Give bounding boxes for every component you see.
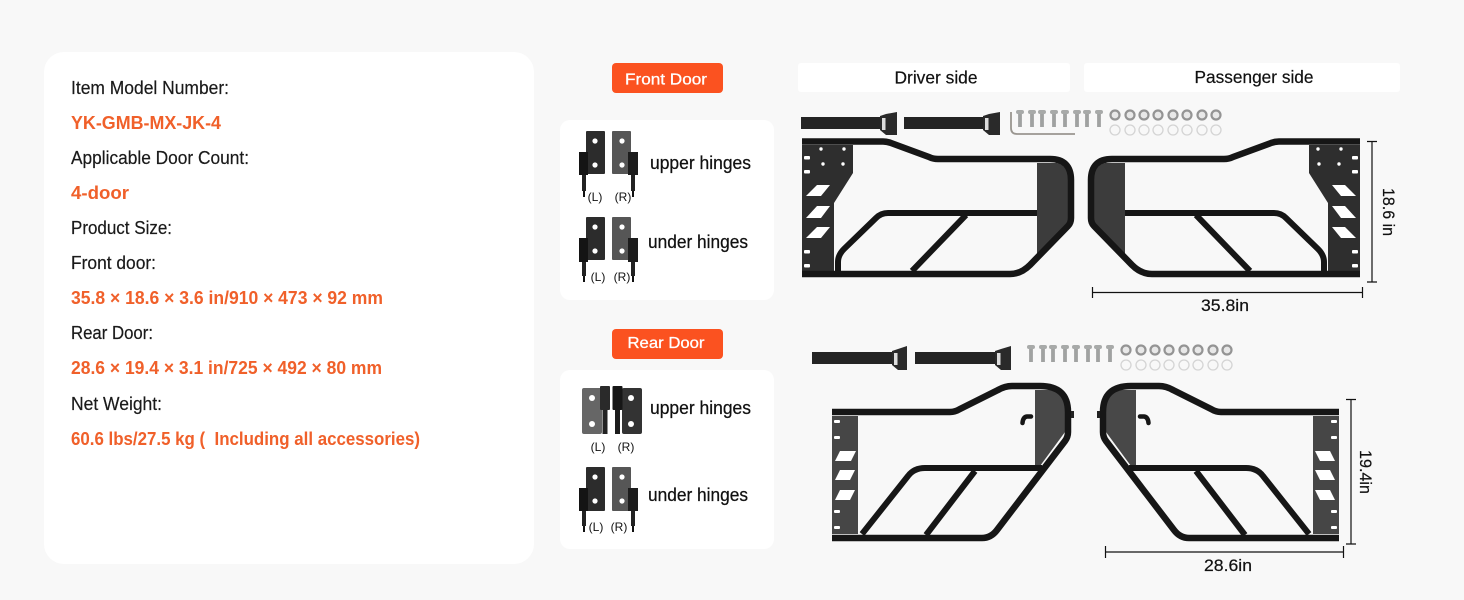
button: front door	[612, 63, 723, 93]
icon: rear upper hinge left	[582, 386, 610, 434]
text: rear door label: Rear Door:	[71, 323, 153, 343]
text: door count value: 4-door	[71, 183, 129, 203]
icon: rear door washers	[1121, 346, 1232, 370]
button: rear door	[612, 329, 723, 359]
text: net weight value: 60.6 lbs/27.5 kg ( Including all accessories)	[71, 429, 420, 449]
icon: front upper hinge left	[579, 131, 605, 197]
panel: rear door hinges	[560, 370, 774, 549]
text: net weight label: Net Weight:	[71, 394, 162, 414]
label: R: (R)	[618, 440, 634, 454]
label: R: (R)	[611, 520, 627, 534]
icon: front door screws and wrench	[1011, 110, 1103, 134]
panel: specifications	[44, 52, 534, 564]
heading: driver side: Driver side	[894, 68, 978, 88]
label: L: (L)	[588, 190, 602, 204]
icon: front upper hinge right	[612, 131, 638, 197]
text: item model number value: YK-GMB-MX-JK-4	[71, 113, 221, 133]
button: front door: Front Door	[625, 72, 708, 88]
text: under hinges: under hinges	[648, 485, 748, 505]
panel: front door hinges	[560, 120, 774, 300]
text: rear door size: 28.6 × 19.4 × 3.1 in/725 × 492 × 80 mm	[71, 358, 382, 378]
text: upper hinges: upper hinges	[650, 153, 751, 173]
door: front driver side	[802, 142, 1071, 274]
text: front door label: Front door:	[71, 253, 156, 273]
dimension: front width	[1092, 287, 1362, 315]
heading: passenger side: Passenger side	[1194, 67, 1314, 87]
label: L: (L)	[589, 520, 603, 534]
heading: driver side	[798, 63, 1070, 92]
text: front door size: 35.8 × 18.6 × 3.6 in/910 × 473 × 92 mm	[71, 288, 383, 308]
icon: front under hinge left	[579, 217, 605, 282]
dimension: rear width: 28.6in	[1204, 556, 1252, 575]
text: under hinges: under hinges	[648, 232, 748, 252]
dimension: rear height	[1346, 400, 1375, 544]
text: door count label: Applicable Door Count:	[71, 148, 249, 168]
icon: front door straps	[801, 112, 1000, 135]
text: product size label: Product Size:	[71, 218, 172, 238]
label: L: (L)	[591, 270, 605, 284]
icon: rear upper hinge right	[612, 386, 642, 434]
icon: front under hinge right	[612, 217, 638, 282]
icon: rear door screws	[1027, 345, 1114, 362]
button: rear door: Rear Door	[628, 335, 705, 352]
label: R: (R)	[614, 270, 630, 284]
dimension: front width: 35.8in	[1201, 296, 1249, 315]
label: L: (L)	[591, 440, 605, 454]
text: upper hinges: upper hinges	[650, 398, 751, 418]
dimension: front height: 18.6 in	[1379, 188, 1398, 236]
icon: rear under hinge right	[612, 467, 638, 532]
label: R: (R)	[615, 190, 631, 204]
dimension: rear width	[1106, 546, 1344, 575]
door: front passenger side	[1091, 142, 1360, 274]
door: rear driver side	[832, 386, 1074, 538]
icon: front door washers	[1110, 110, 1221, 135]
icon: rear door straps	[812, 346, 1011, 370]
text: item model number label: Item Model Number:	[71, 78, 229, 98]
heading: passenger side	[1084, 63, 1400, 92]
dimension: front height	[1367, 142, 1398, 282]
door: rear passenger side	[1097, 386, 1339, 538]
icon: rear under hinge left	[579, 467, 605, 532]
dimension: rear height: 19.4in	[1356, 450, 1375, 494]
